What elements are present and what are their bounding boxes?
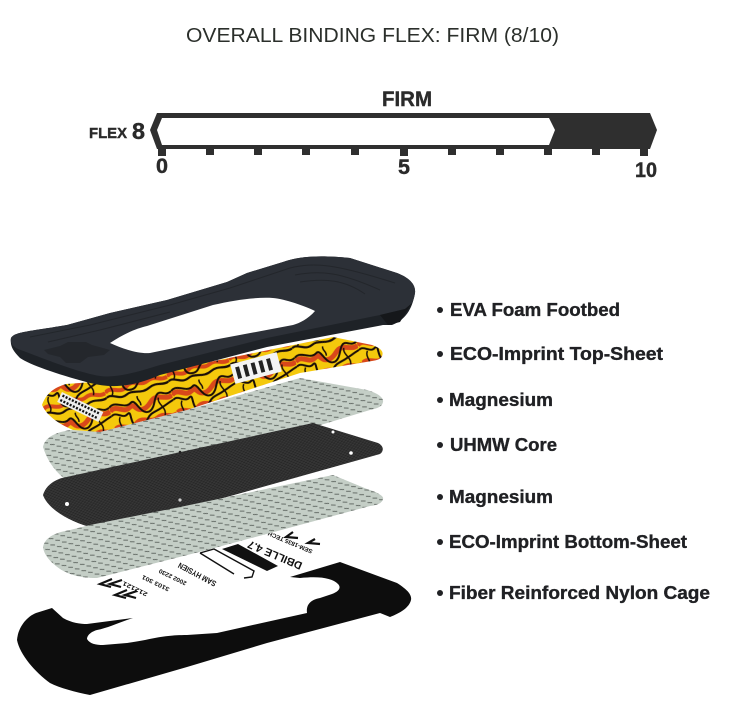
layer: magnesium — [43, 378, 383, 492]
printed text: SEM-1835 TECH — [267, 529, 314, 554]
printed text: DBILLE 4.7 — [246, 538, 304, 571]
printed text: 212121 — [121, 579, 149, 597]
flex rating label — [89, 118, 145, 144]
layer labels — [437, 300, 710, 603]
layer: magnesium lower — [43, 475, 383, 578]
printed chevrons — [100, 532, 320, 598]
printed text — [121, 529, 314, 597]
exploded binding layers — [11, 256, 415, 695]
printed band — [222, 544, 278, 571]
scale ticks — [158, 149, 648, 156]
scale numbers: 5 — [398, 156, 410, 179]
label: EVA Foam Footbed: EVA Foam Footbed — [450, 300, 620, 320]
label: UHMW Core: UHMW Core — [450, 435, 557, 455]
label: Fiber Reinforced Nylon Cage: Fiber Reinforced Nylon Cage — [449, 583, 710, 603]
scale numbers — [156, 155, 657, 182]
scale numbers: 10 — [635, 159, 657, 182]
title: OVERALL BINDING FLEX: FIRM (8/10) — [186, 25, 559, 47]
printed text: SAM HYSIEN — [176, 560, 218, 588]
footbed heel notch — [380, 303, 412, 325]
scale heading: FIRM: FIRM — [382, 88, 432, 111]
layer: nylon cage — [17, 562, 411, 695]
footbed centre cutout — [110, 298, 315, 353]
layer: bottom-sheet printing — [100, 529, 320, 598]
top-sheet logo — [230, 352, 282, 384]
footbed d-pad logo — [44, 342, 110, 363]
label: ECO-Imprint Bottom-Sheet: ECO-Imprint Bottom-Sheet — [449, 532, 687, 552]
flex rating label: 8 — [132, 118, 145, 144]
layer: ECO-imprint top-sheet — [42, 337, 383, 432]
scale numbers: 0 — [156, 155, 168, 178]
printed text: 2002 2230 — [158, 567, 188, 586]
flex rating label: FLEX — [89, 125, 127, 142]
label: ECO-Imprint Top-Sheet: ECO-Imprint Top-Sheet — [450, 344, 663, 364]
flex scale chart — [89, 88, 657, 182]
flex bar — [150, 113, 657, 149]
label: Magnesium: Magnesium — [449, 390, 553, 410]
label: Magnesium lower: Magnesium — [449, 487, 553, 507]
top-sheet small label — [57, 392, 103, 422]
layer: EVA foam footbed — [11, 256, 415, 386]
footbed ridges — [30, 265, 395, 342]
printed text: 3103 301 — [141, 573, 171, 592]
layer: UHMW core — [43, 423, 383, 527]
printed box — [200, 549, 254, 578]
